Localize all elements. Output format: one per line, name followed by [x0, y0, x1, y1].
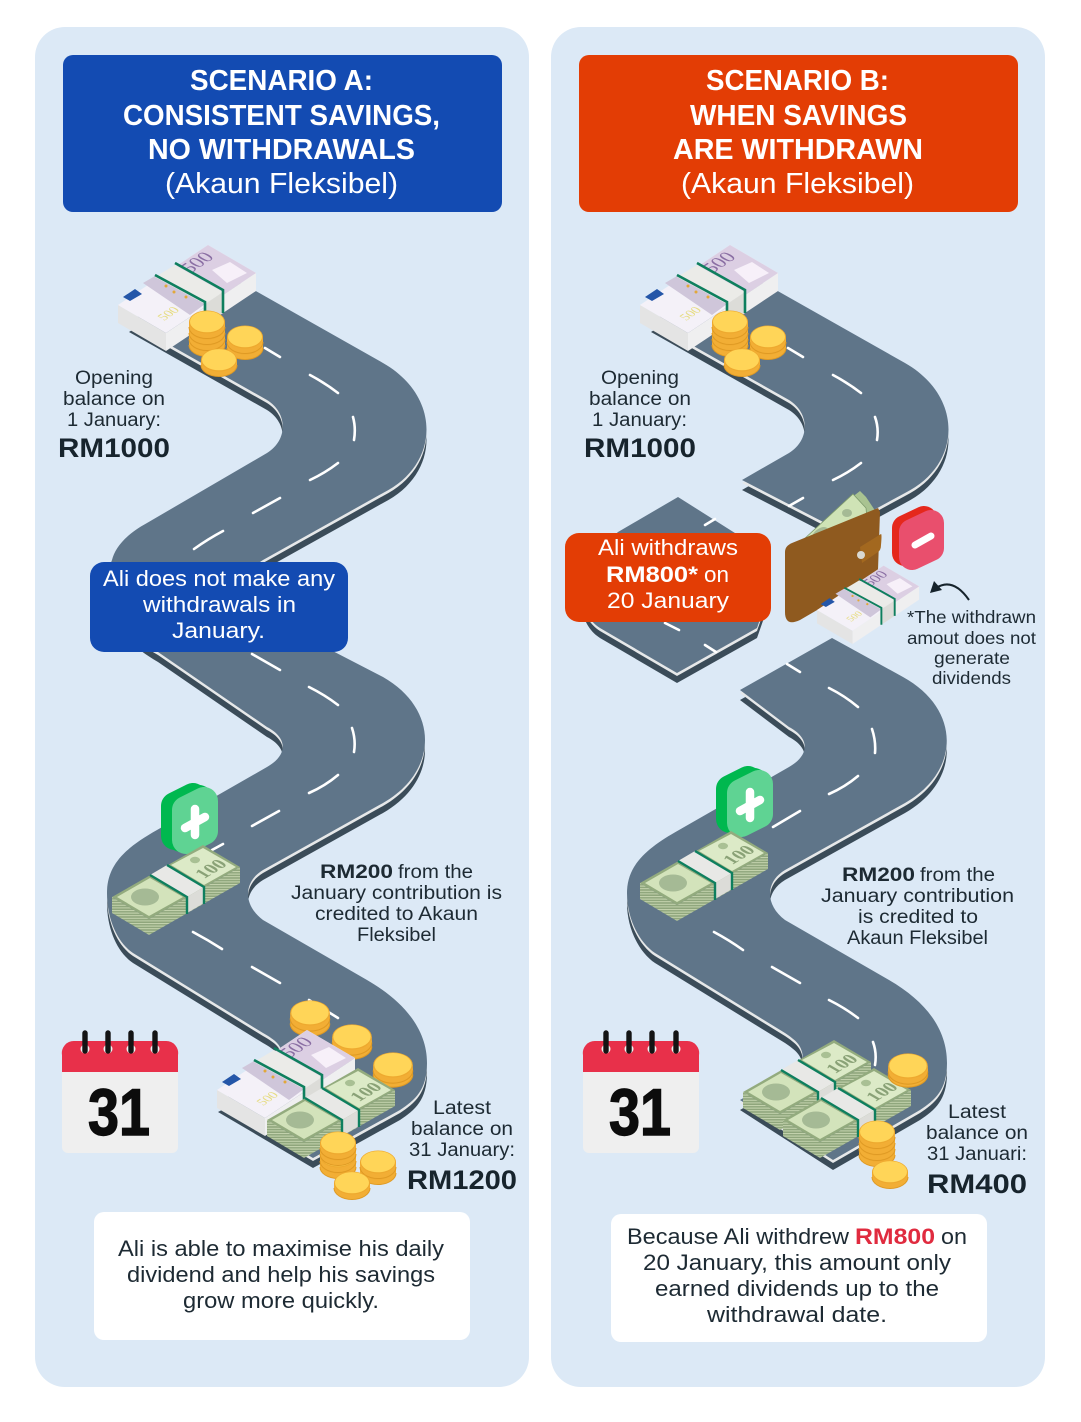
callout: no withdrawals: January. — [172, 618, 265, 643]
conclusion box A: Ali is able to maximise his daily — [118, 1236, 444, 1261]
icon: euro banknotes, opening — [118, 245, 256, 351]
callout: no withdrawals — [90, 562, 348, 652]
latest balance text: Latest — [433, 1098, 492, 1119]
icon: calendar: 31 — [609, 1075, 671, 1149]
latest balance text: 31 January: — [409, 1140, 515, 1161]
header B: (Akaun Fleksibel) — [681, 168, 914, 200]
header A — [63, 55, 502, 212]
latest balance text: Latest — [948, 1102, 1007, 1123]
conclusion box A: dividend and help his savings — [127, 1262, 435, 1287]
opening balance text: balance on — [589, 389, 691, 410]
conclusion box B: RM800 — [855, 1224, 935, 1249]
icon: coins, opening — [189, 310, 263, 376]
latest balance text: balance on — [926, 1123, 1028, 1144]
icon: coins, final — [320, 1132, 396, 1200]
icon: dollar banknotes — [640, 831, 768, 921]
icon: dollar banknotes — [112, 845, 240, 935]
callout: no withdrawals: Ali does not make any — [103, 566, 335, 591]
icon: calendar: 31 — [88, 1075, 150, 1149]
panel: scenario B — [551, 27, 1045, 1387]
road B middle segment — [582, 497, 765, 683]
opening balance text: balance on — [63, 389, 165, 410]
opening balance text: 1 January: — [67, 410, 161, 431]
contribution text: credited to Akaun — [315, 904, 478, 925]
icon: final dollar pile — [743, 1040, 911, 1158]
header A: CONSISTENT SAVINGS, — [123, 100, 440, 132]
note: withdrawn amount: dividends — [932, 668, 1011, 688]
conclusion box B: withdrawal date. — [706, 1302, 887, 1327]
note: withdrawn amount — [907, 607, 1036, 688]
contribution text: Fleksibel — [357, 925, 436, 946]
contribution text: January contribution is — [291, 883, 502, 904]
conclusion box B: 20 January, this amount only — [643, 1250, 951, 1275]
icon: calendar — [583, 1033, 699, 1153]
contribution text: Akaun Fleksibel — [847, 928, 988, 949]
contribution text — [291, 862, 502, 946]
header B: WHEN SAVINGS — [690, 100, 907, 132]
opening balance text: 1 January: — [592, 410, 687, 431]
header A: NO WITHDRAWALS — [148, 134, 415, 166]
icon: euro banknotes, opening — [640, 245, 778, 351]
icon: loose coins on road — [290, 1000, 413, 1087]
conclusion box A — [94, 1212, 470, 1340]
icon: calendar — [62, 1033, 178, 1153]
callout: withdrawal: 20 January — [607, 588, 729, 613]
icon: euro banknotes, withdrawn — [817, 566, 919, 644]
note: withdrawn amount: amout does not — [907, 628, 1036, 648]
header A: (Akaun Fleksibel) — [165, 168, 398, 200]
header A: SCENARIO A: — [190, 65, 373, 97]
opening balance text: Opening — [75, 368, 153, 389]
conclusion box B — [611, 1214, 987, 1342]
contribution text: RM200 — [320, 862, 393, 883]
note: withdrawn amount: generate — [934, 648, 1010, 668]
contribution text — [821, 865, 1014, 949]
callout: withdrawal — [565, 533, 771, 622]
arrow to euro stack — [930, 581, 969, 600]
conclusion box A: grow more quickly. — [183, 1288, 379, 1313]
latest balance text: 31 Januari: — [927, 1144, 1027, 1165]
opening balance text: Opening — [601, 368, 679, 389]
callout: withdrawal: on — [704, 562, 729, 587]
road B top segment — [651, 268, 948, 551]
note: withdrawn amount: *The withdrawn — [907, 607, 1036, 627]
icon: minus badge — [905, 519, 931, 557]
header B — [579, 55, 1018, 212]
opening balance text: RM1000 — [584, 433, 696, 463]
latest balance text — [926, 1102, 1028, 1199]
icon: plus badge — [730, 780, 760, 823]
icon: coins, final — [859, 1053, 928, 1188]
icon: plus badge — [175, 797, 205, 840]
icon: final money pile — [217, 1030, 395, 1158]
conclusion box B: on — [941, 1224, 967, 1249]
callout: withdrawal: RM800* — [606, 562, 699, 587]
contribution text: is credited to — [858, 907, 978, 928]
opening balance text: RM1000 — [58, 433, 170, 463]
latest balance text: RM1200 — [407, 1165, 517, 1195]
road B bottom segment — [627, 638, 947, 1170]
contribution text: RM200 — [842, 865, 915, 886]
opening balance text — [58, 368, 170, 463]
opening balance text — [584, 368, 696, 463]
conclusion box B: Because Ali withdrew — [627, 1224, 849, 1249]
contribution text: from the — [920, 865, 995, 886]
latest balance text: RM400 — [927, 1169, 1027, 1199]
contribution text: January contribution — [821, 886, 1014, 907]
icon: wallet — [785, 491, 882, 622]
latest balance text: balance on — [411, 1119, 513, 1140]
conclusion box B: earned dividends up to the — [655, 1276, 939, 1301]
road A — [107, 268, 427, 1168]
panel: scenario A — [35, 27, 529, 1387]
header B: SCENARIO B: — [706, 65, 889, 97]
contribution text: from the — [398, 862, 473, 883]
callout: no withdrawals: withdrawals in — [142, 592, 296, 617]
icon: coins, opening — [712, 310, 786, 376]
header B: ARE WITHDRAWN — [673, 134, 923, 166]
latest balance text — [407, 1098, 517, 1195]
callout: withdrawal: Ali withdraws — [598, 535, 738, 560]
